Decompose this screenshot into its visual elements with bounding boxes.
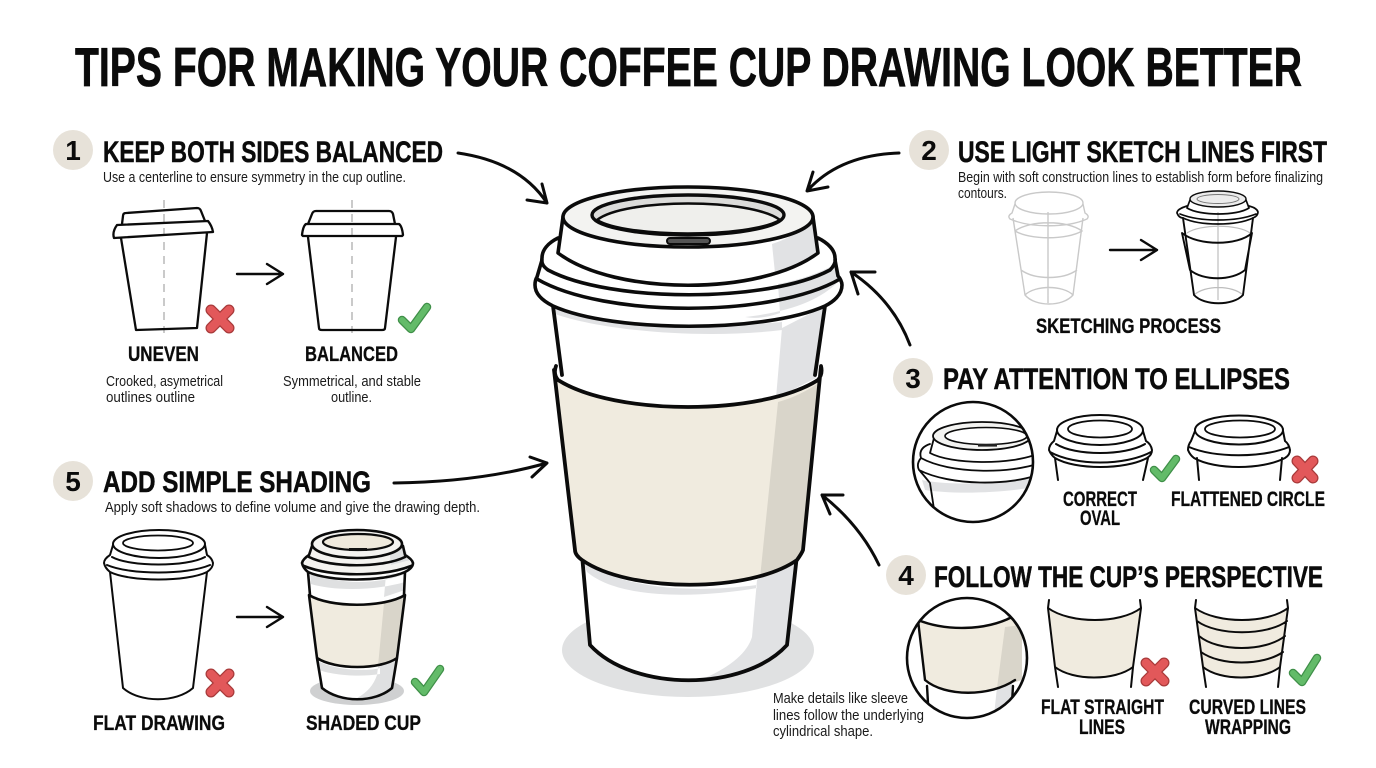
icon: uneven cup — [113, 200, 213, 333]
heading: KEEP BOTH SIDES BALANCED — [103, 136, 443, 169]
uneven caption: outlines outline — [106, 389, 195, 406]
panel: tip 1 keep both sides balanced — [53, 130, 443, 406]
uneven caption: Crooked, asymetrical — [106, 373, 223, 390]
description: contours. — [958, 185, 1007, 202]
lid silhouette — [535, 217, 842, 326]
description: Use a centerline to ensure symmetry in the cup outline. — [103, 169, 406, 186]
magnifier circle — [907, 598, 1027, 725]
icon: red cross — [1297, 461, 1313, 478]
label flat straight lines: LINES — [1079, 716, 1125, 739]
label correct oval: OVAL — [1080, 507, 1120, 530]
icon: red cross — [211, 674, 229, 692]
label curved lines wrapping — [1189, 696, 1306, 739]
arrow: tip 5 to cup — [394, 457, 547, 483]
icon: red cross — [211, 310, 229, 328]
uneven caption — [106, 373, 223, 406]
number badge 1: 1 — [65, 135, 81, 166]
label flat drawing: FLAT DRAWING — [93, 712, 225, 735]
upper body shade — [553, 306, 825, 398]
label correct oval — [1063, 488, 1137, 530]
label balanced: BALANCED — [305, 343, 398, 366]
label flat straight lines — [1041, 696, 1164, 739]
description: lines follow the underlying — [773, 707, 924, 724]
panel: tip 5 add simple shading — [53, 461, 480, 735]
icon: balanced cup — [302, 200, 403, 333]
sip slot — [667, 238, 710, 244]
label flattened circle: FLATTENED CIRCLE — [1171, 488, 1325, 511]
number badge 5: 5 — [65, 466, 81, 497]
icon: green check — [402, 307, 427, 329]
heading: PAY ATTENTION TO ELLIPSES — [943, 363, 1290, 396]
arrow — [237, 607, 283, 627]
arrow — [237, 264, 283, 284]
icon: red cross — [1146, 663, 1164, 681]
cup upper body — [553, 306, 825, 375]
number badge 3 — [893, 358, 933, 398]
lid shades — [745, 217, 838, 318]
icon: green check — [1293, 658, 1317, 682]
balanced caption: outline. — [331, 389, 372, 406]
arrow: tip 1 to cup — [458, 153, 547, 203]
number badge 3: 3 — [905, 363, 921, 394]
lid opening — [592, 195, 784, 235]
description: cylindrical shape. — [773, 723, 873, 740]
label sketching process: SKETCHING PROCESS — [1036, 315, 1221, 338]
number badge 4 — [886, 555, 926, 595]
panel: tip 2 use light sketch lines first — [909, 130, 1327, 338]
icon: green check — [1154, 459, 1176, 478]
label shaded cup: SHADED CUP — [306, 712, 421, 735]
arrow — [1110, 240, 1157, 260]
sleeve — [554, 368, 822, 585]
lower body shade — [583, 555, 797, 678]
balanced caption: Symmetrical, and stable — [283, 373, 421, 390]
number badge 4: 4 — [898, 560, 914, 591]
label flat straight lines: FLAT STRAIGHT — [1041, 696, 1164, 719]
description: Apply soft shadows to define volume and give the drawing depth. — [105, 499, 480, 516]
cup lower body — [582, 555, 797, 680]
icon: correct oval cup — [1049, 415, 1152, 480]
panel: tip 4 follow the cup's perspective — [773, 555, 1323, 740]
arrow: tip 3 to cup — [851, 272, 910, 345]
sleeve shade — [760, 382, 820, 578]
number badge 5 — [53, 461, 93, 501]
icon: curved wrapped sleeve — [1195, 600, 1288, 687]
label uneven: UNEVEN — [128, 343, 199, 366]
number badge 2 — [909, 130, 949, 170]
magnifier circle — [913, 402, 1040, 522]
ground shadow — [562, 603, 814, 697]
icon: flat sleeve — [1048, 600, 1141, 687]
description — [958, 169, 1323, 202]
label curved lines wrapping: CURVED LINES — [1189, 696, 1306, 719]
icon: green check — [415, 669, 440, 692]
central coffee cup illustration — [535, 187, 842, 697]
icon: construction sketch cup — [1009, 192, 1088, 304]
icon: finished outline cup — [1177, 191, 1258, 303]
icon: flattened circle cup — [1188, 416, 1290, 480]
icon: flat cup — [104, 530, 213, 699]
label curved lines wrapping: WRAPPING — [1205, 716, 1291, 739]
number badge 1 — [53, 130, 93, 170]
balanced caption — [283, 373, 421, 406]
arrow: tip 2 to cup — [807, 153, 899, 191]
lid outlines — [535, 217, 842, 326]
label correct oval: CORRECT — [1063, 488, 1137, 511]
heading: ADD SIMPLE SHADING — [103, 466, 371, 499]
description: Make details like sleeve — [773, 690, 908, 707]
description — [773, 690, 924, 740]
lid top — [563, 187, 813, 247]
arrow: tip 4 to cup — [822, 495, 879, 565]
number badge 2: 2 — [921, 135, 937, 166]
icon: shaded cup — [302, 530, 413, 705]
panel: tip 3 pay attention to ellipses — [893, 358, 1325, 530]
